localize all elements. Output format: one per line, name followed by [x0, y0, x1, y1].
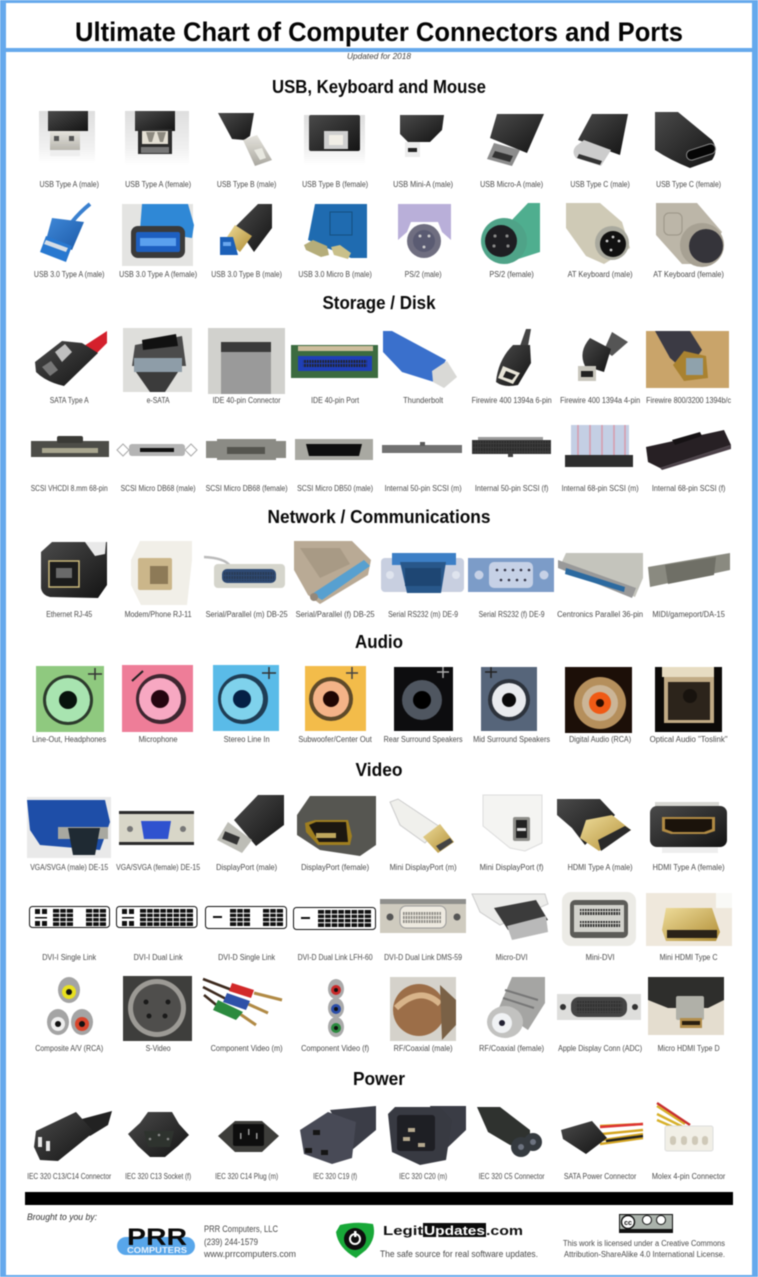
connector: AT Keyboard male: AT Keyboard (male) [568, 270, 633, 279]
connector: IEC 320 C5: IEC 320 C5 Connector [479, 1172, 545, 1181]
connector: IEC 320 C20 [388, 1106, 466, 1181]
connector: e-SATA [123, 328, 192, 405]
connector: HDMI Type A male [557, 799, 633, 872]
connector: USB 3.0 Type A female [119, 204, 197, 279]
connector: Composite A/V RCA [35, 977, 103, 1053]
connector: Stereo Line In: Stereo Line In [224, 735, 270, 744]
connector: PS/2 male [398, 204, 451, 279]
connector: Mid Surround Speakers: Mid Surround Speakers [473, 735, 550, 744]
connector: VGA/SVGA male DE-15 [27, 797, 111, 872]
connector: SCSI VHCDI 8mm 68-pin [31, 436, 109, 493]
connector: USB Type A male: USB Type A (male) [39, 180, 99, 189]
icon: Creative Commons BY-SA badge: cc [624, 1220, 632, 1227]
connector: HDMI Type A female: HDMI Type A (female) [653, 863, 725, 872]
connector: Firewire 800/3200 [646, 331, 731, 405]
connector: USB Micro-A male [480, 114, 544, 189]
connector: SCSI Micro DB68 male: SCSI Micro DB68 (male) [121, 484, 196, 493]
text: PRR contact details: PRR Computers, LLC [204, 1224, 278, 1234]
connector: USB Mini-A male: USB Mini-A (male) [393, 180, 453, 189]
connector: HDMI Type A female [650, 802, 727, 872]
connector: Molex 4-pin [652, 1103, 726, 1181]
connector: Serial/Parallel female DB-25: Serial/Parallel (f) DB-25 [296, 610, 375, 619]
connector: USB Type C female [655, 112, 721, 189]
connector: IDE 40-pin Port [291, 345, 378, 405]
connector: Component Video male: Component Video (m) [211, 1044, 283, 1053]
connector: USB Type B female [302, 115, 368, 189]
connector: Mini DisplayPort male: Mini DisplayPort (m) [390, 863, 457, 872]
connector: IDE 40-pin Connector [208, 328, 285, 405]
connector: USB Type B female: USB Type B (female) [302, 180, 368, 189]
black footer bar [25, 1192, 733, 1205]
title: Ultimate Chart of Computer Connectors and Ports [75, 17, 683, 47]
connector: AT Keyboard female: AT Keyboard (female) [653, 270, 724, 279]
connector: Internal 68-pin SCSI male [562, 425, 639, 493]
connector: PS/2 female: PS/2 (female) [489, 270, 534, 279]
text: license [563, 1239, 725, 1259]
connector: Apple Display Conn ADC [557, 994, 642, 1053]
connector: Subwoofer/Center Out [298, 666, 373, 744]
connector: Component Video female [301, 979, 369, 1053]
connector: Serial RS232 male DE-9: Serial RS232 (m) DE-9 [388, 610, 459, 619]
subtitle: Updated for 2018 [347, 51, 411, 61]
icon: DVI-D Dual Link LFH-60: DVI-D Dual Link LFH-60 [298, 953, 373, 962]
connector: Rear Surround Speakers: Rear Surround Speakers [384, 735, 463, 744]
connector: SCSI Micro DB68 female [206, 439, 288, 493]
connector: Serial/Parallel male DB-25 [204, 557, 288, 619]
text: license: Attribution-ShareAlike 4.0 International License. [564, 1250, 725, 1259]
connector: IEC 320 C14 Plug: IEC 320 C14 Plug (m) [215, 1172, 278, 1181]
connector: Internal 50-pin SCSI male [382, 442, 462, 493]
connector: Centronics Parallel 36-pin [557, 553, 643, 619]
connector: MIDI/gameport DA-15 [648, 553, 730, 619]
connector: IEC 320 C13 Socket: IEC 320 C13 Socket (f) [125, 1172, 191, 1181]
connector: USB 3.0 Micro B male [298, 204, 372, 279]
heading: Audio: Audio [355, 632, 403, 652]
connector: Ethernet RJ-45 [41, 542, 107, 619]
icon: DVI-D Single Link: DVI-D Single Link [218, 953, 276, 962]
connector: Micro HDMI Type D: Micro HDMI Type D [658, 1044, 720, 1053]
heading: USB, Keyboard and Mouse: USB, Keyboard and Mouse [272, 77, 486, 97]
connector: SCSI Micro DB68 female: SCSI Micro DB68 (female) [206, 484, 288, 493]
logo: LegitUpdates wordmark: .com [486, 1223, 523, 1238]
connector: Firewire 400 4-pin [560, 332, 640, 405]
connector: Apple Display Conn ADC: Apple Display Conn (ADC) [558, 1044, 642, 1053]
connector: USB 3.0 Micro B male: USB 3.0 Micro B (male) [298, 270, 372, 279]
text: LegitUpdates tagline: The safe source for real software updates. [380, 1249, 538, 1259]
connector: S-Video: S-Video [146, 1044, 171, 1053]
connector: Firewire 400 4-pin: Firewire 400 1394a 4-pin [560, 396, 640, 405]
heading: Storage / Disk: Storage / Disk [322, 293, 436, 313]
connector: Internal 68-pin SCSI female [646, 430, 731, 493]
connector: SCSI Micro DB50 male: SCSI Micro DB50 (male) [297, 484, 373, 493]
connector: DisplayPort male [216, 795, 284, 872]
connector: Digital Audio RCA [565, 667, 632, 744]
connector: RF/Coaxial male [390, 977, 456, 1053]
connector: DisplayPort female: DisplayPort (female) [301, 863, 369, 872]
connector: Internal 50-pin SCSI female: Internal 50-pin SCSI (f) [475, 484, 549, 493]
connector: SATA Power [561, 1121, 643, 1181]
connector: MIDI/gameport DA-15: MIDI/gameport/DA-15 [652, 610, 725, 619]
connector: USB Type C male [570, 114, 630, 189]
connector: Serial/Parallel male DB-25: Serial/Parallel (m) DB-25 [206, 610, 288, 619]
connector: Firewire 800/3200: Firewire 800/3200 1394b/c [646, 396, 731, 405]
connector: Microphone [122, 665, 193, 744]
connector: Component Video female: Component Video (f) [301, 1044, 369, 1053]
connector: PS/2 male: PS/2 (male) [405, 270, 442, 279]
connector: SATA Power: SATA Power Connector [564, 1172, 637, 1181]
connector: Composite A/V RCA: Composite A/V (RCA) [35, 1044, 103, 1053]
connector: DisplayPort female [297, 796, 376, 872]
icon: DVI-D Single Link [206, 906, 286, 962]
connector: USB 3.0 Type B male [211, 204, 282, 279]
logo: PRR Computers: COMPUTERS [127, 1245, 187, 1255]
connector: USB 3.0 Type A male [34, 204, 105, 279]
icon: Creative Commons BY-SA badge [620, 1214, 672, 1233]
connector: DisplayPort male: DisplayPort (male) [216, 863, 277, 872]
connector: AT Keyboard female [653, 203, 724, 279]
connector: Mini HDMI Type C: Mini HDMI Type C [660, 953, 718, 962]
connector: Optical Audio Toslink [650, 667, 728, 744]
connector: Serial RS232 female DE-9 [468, 558, 554, 619]
connector: Component Video male [203, 979, 283, 1053]
connector: SATA Type A: SATA Type A [50, 396, 89, 405]
connector: Internal 68-pin SCSI male: Internal 68-pin SCSI (m) [562, 484, 639, 493]
connector: IEC 320 C5 [477, 1107, 545, 1181]
connector: Mini DisplayPort female [480, 795, 544, 872]
connector: DVI-D Dual Link DMS-59 [380, 899, 466, 962]
connector: Line-Out, Headphones [32, 666, 106, 744]
connector: USB Type B male: USB Type B (male) [217, 180, 277, 189]
connector: HDMI Type A male: HDMI Type A (male) [568, 863, 633, 872]
connector: IEC 320 C19: IEC 320 C19 (f) [313, 1172, 357, 1181]
connector: IEC 320 C13 Socket [125, 1112, 191, 1181]
heading: Network / Communications: Network / Communications [268, 507, 490, 527]
connector: IDE 40-pin Connector: IDE 40-pin Connector [213, 396, 281, 405]
logo: PRR Computers: PRR [127, 1224, 187, 1251]
connector: SATA Type A [35, 331, 107, 405]
connector: IEC 320 C14 Plug [215, 1121, 279, 1181]
connector: Centronics Parallel 36-pin: Centronics Parallel 36-pin [557, 610, 643, 619]
connector: Thunderbolt: Thunderbolt [403, 396, 444, 405]
connector: Internal 68-pin SCSI female: Internal 68-pin SCSI (f) [652, 484, 726, 493]
connector: DVI-D Dual Link DMS-59: DVI-D Dual Link DMS-59 [384, 953, 463, 962]
connector: USB Type C female: USB Type C (female) [656, 180, 721, 189]
connector: Subwoofer/Center Out: Subwoofer/Center Out [298, 735, 373, 744]
connector: Mini-DVI: Mini-DVI [586, 953, 615, 962]
connector: Firewire 400 6-pin [472, 329, 552, 405]
connector: IEC 320 C19 [300, 1106, 376, 1181]
connector: SCSI Micro DB68 male [117, 444, 197, 493]
connector: Molex 4-pin: Molex 4-pin Connector [652, 1172, 726, 1181]
connector: IEC 320 C20: IEC 320 C20 (m) [399, 1172, 447, 1181]
connector: IEC 320 C13/C14 [27, 1111, 112, 1181]
icon: DVI-I Single Link [30, 906, 110, 962]
connector: Serial RS232 male DE-9 [381, 553, 464, 619]
connector: Micro-DVI [472, 894, 548, 962]
connector: Mid Surround Speakers [473, 667, 550, 744]
connector: AT Keyboard male [566, 203, 633, 279]
connector: USB 3.0 Type A female: USB 3.0 Type A (female) [119, 270, 197, 279]
connector: VGA/SVGA male DE-15: VGA/SVGA (male) DE-15 [30, 863, 109, 872]
connector: Mini HDMI Type C [646, 893, 732, 962]
text: PRR contact details: www.prrcomputers.com [203, 1249, 296, 1259]
connector: USB Micro-A male: USB Micro-A (male) [480, 180, 543, 189]
connector: Micro-DVI: Micro-DVI [496, 953, 528, 962]
connector: SCSI VHCDI 8mm 68-pin: SCSI VHCDI 8.mm 68-pin [31, 484, 108, 493]
connector: SCSI Micro DB50 male [295, 439, 373, 493]
logo: LegitUpdates icon [336, 1223, 374, 1258]
connector: Digital Audio RCA: Digital Audio (RCA) [569, 735, 631, 744]
connector: Line-Out, Headphones: Line-Out, Headphones [32, 735, 106, 744]
connector: USB Type C male: USB Type C (male) [570, 180, 630, 189]
connector: Mini DisplayPort female: Mini DisplayPort (f) [480, 863, 544, 872]
connector: IEC 320 C13/C14: IEC 320 C13/C14 Connector [27, 1172, 111, 1181]
connector: S-Video [123, 976, 192, 1053]
connector: Optical Audio Toslink: Optical Audio "Toslink" [650, 735, 728, 744]
connector: Mini-DVI [562, 892, 636, 962]
connector: USB Type B male [217, 113, 277, 189]
connector: Modem/Phone RJ-11 [125, 541, 192, 619]
heading: Power: Power [353, 1069, 405, 1089]
icon: DVI-D Dual Link LFH-60 [294, 908, 376, 962]
connector: IDE 40-pin Port: IDE 40-pin Port [311, 396, 360, 405]
connector: VGA/SVGA female DE-15: VGA/SVGA (female) DE-15 [116, 863, 201, 872]
connector: VGA/SVGA female DE-15 [116, 811, 201, 872]
connector: Ethernet RJ-45: Ethernet RJ-45 [46, 610, 93, 619]
icon: DVI-I Dual Link [116, 906, 197, 962]
icon: DVI-I Single Link: DVI-I Single Link [42, 953, 97, 962]
logo: LegitUpdates wordmark: Legit [383, 1223, 424, 1238]
connector: Serial/Parallel female DB-25 [294, 541, 375, 619]
connector: Firewire 400 6-pin: Firewire 400 1394a 6-pin [472, 396, 552, 405]
connector: Stereo Line In [213, 665, 279, 744]
logo: LegitUpdates wordmark [383, 1223, 523, 1238]
connector: USB 3.0 Type B male: USB 3.0 Type B (male) [211, 270, 282, 279]
logo: PRR Computers [117, 1224, 195, 1255]
text: brought to you by: Brought to you by: [27, 1212, 97, 1223]
connector: USB Type A female [125, 111, 191, 189]
text: license: This work is licensed under a Creative Commons [563, 1239, 725, 1248]
connector: Internal 50-pin SCSI male: Internal 50-pin SCSI (m) [385, 484, 462, 493]
connector: Modem/Phone RJ-11: Modem/Phone RJ-11 [125, 610, 192, 619]
connector: USB Mini-A male [393, 115, 453, 189]
connector: Serial RS232 female DE-9: Serial RS232 (f) DE-9 [479, 610, 545, 619]
connector: Micro HDMI Type D [648, 977, 724, 1053]
connector: Internal 50-pin SCSI female [472, 437, 551, 493]
connector: Thunderbolt [383, 331, 457, 405]
text: PRR contact details [203, 1224, 296, 1259]
connector: RF/Coaxial female [479, 977, 545, 1053]
connector: RF/Coaxial male: RF/Coaxial (male) [394, 1044, 453, 1053]
connector: Rear Surround Speakers [384, 667, 463, 744]
connector: Mini DisplayPort male [390, 799, 457, 872]
connector: Microphone: Microphone [139, 735, 178, 744]
text: PRR contact details: (239) 244-1579 [204, 1237, 258, 1247]
connector: USB Type A female: USB Type A (female) [125, 180, 191, 189]
connector: USB Type A male [39, 111, 99, 189]
heading: Video: Video [356, 760, 402, 780]
icon: DVI-I Dual Link: DVI-I Dual Link [134, 953, 184, 962]
connector: PS/2 female [481, 203, 540, 279]
logo: LegitUpdates wordmark: Updates [424, 1223, 485, 1238]
connector: RF/Coaxial female: RF/Coaxial (female) [479, 1044, 544, 1053]
connector: USB 3.0 Type A male: USB 3.0 Type A (male) [34, 270, 105, 279]
connector: e-SATA: e-SATA [147, 396, 170, 405]
